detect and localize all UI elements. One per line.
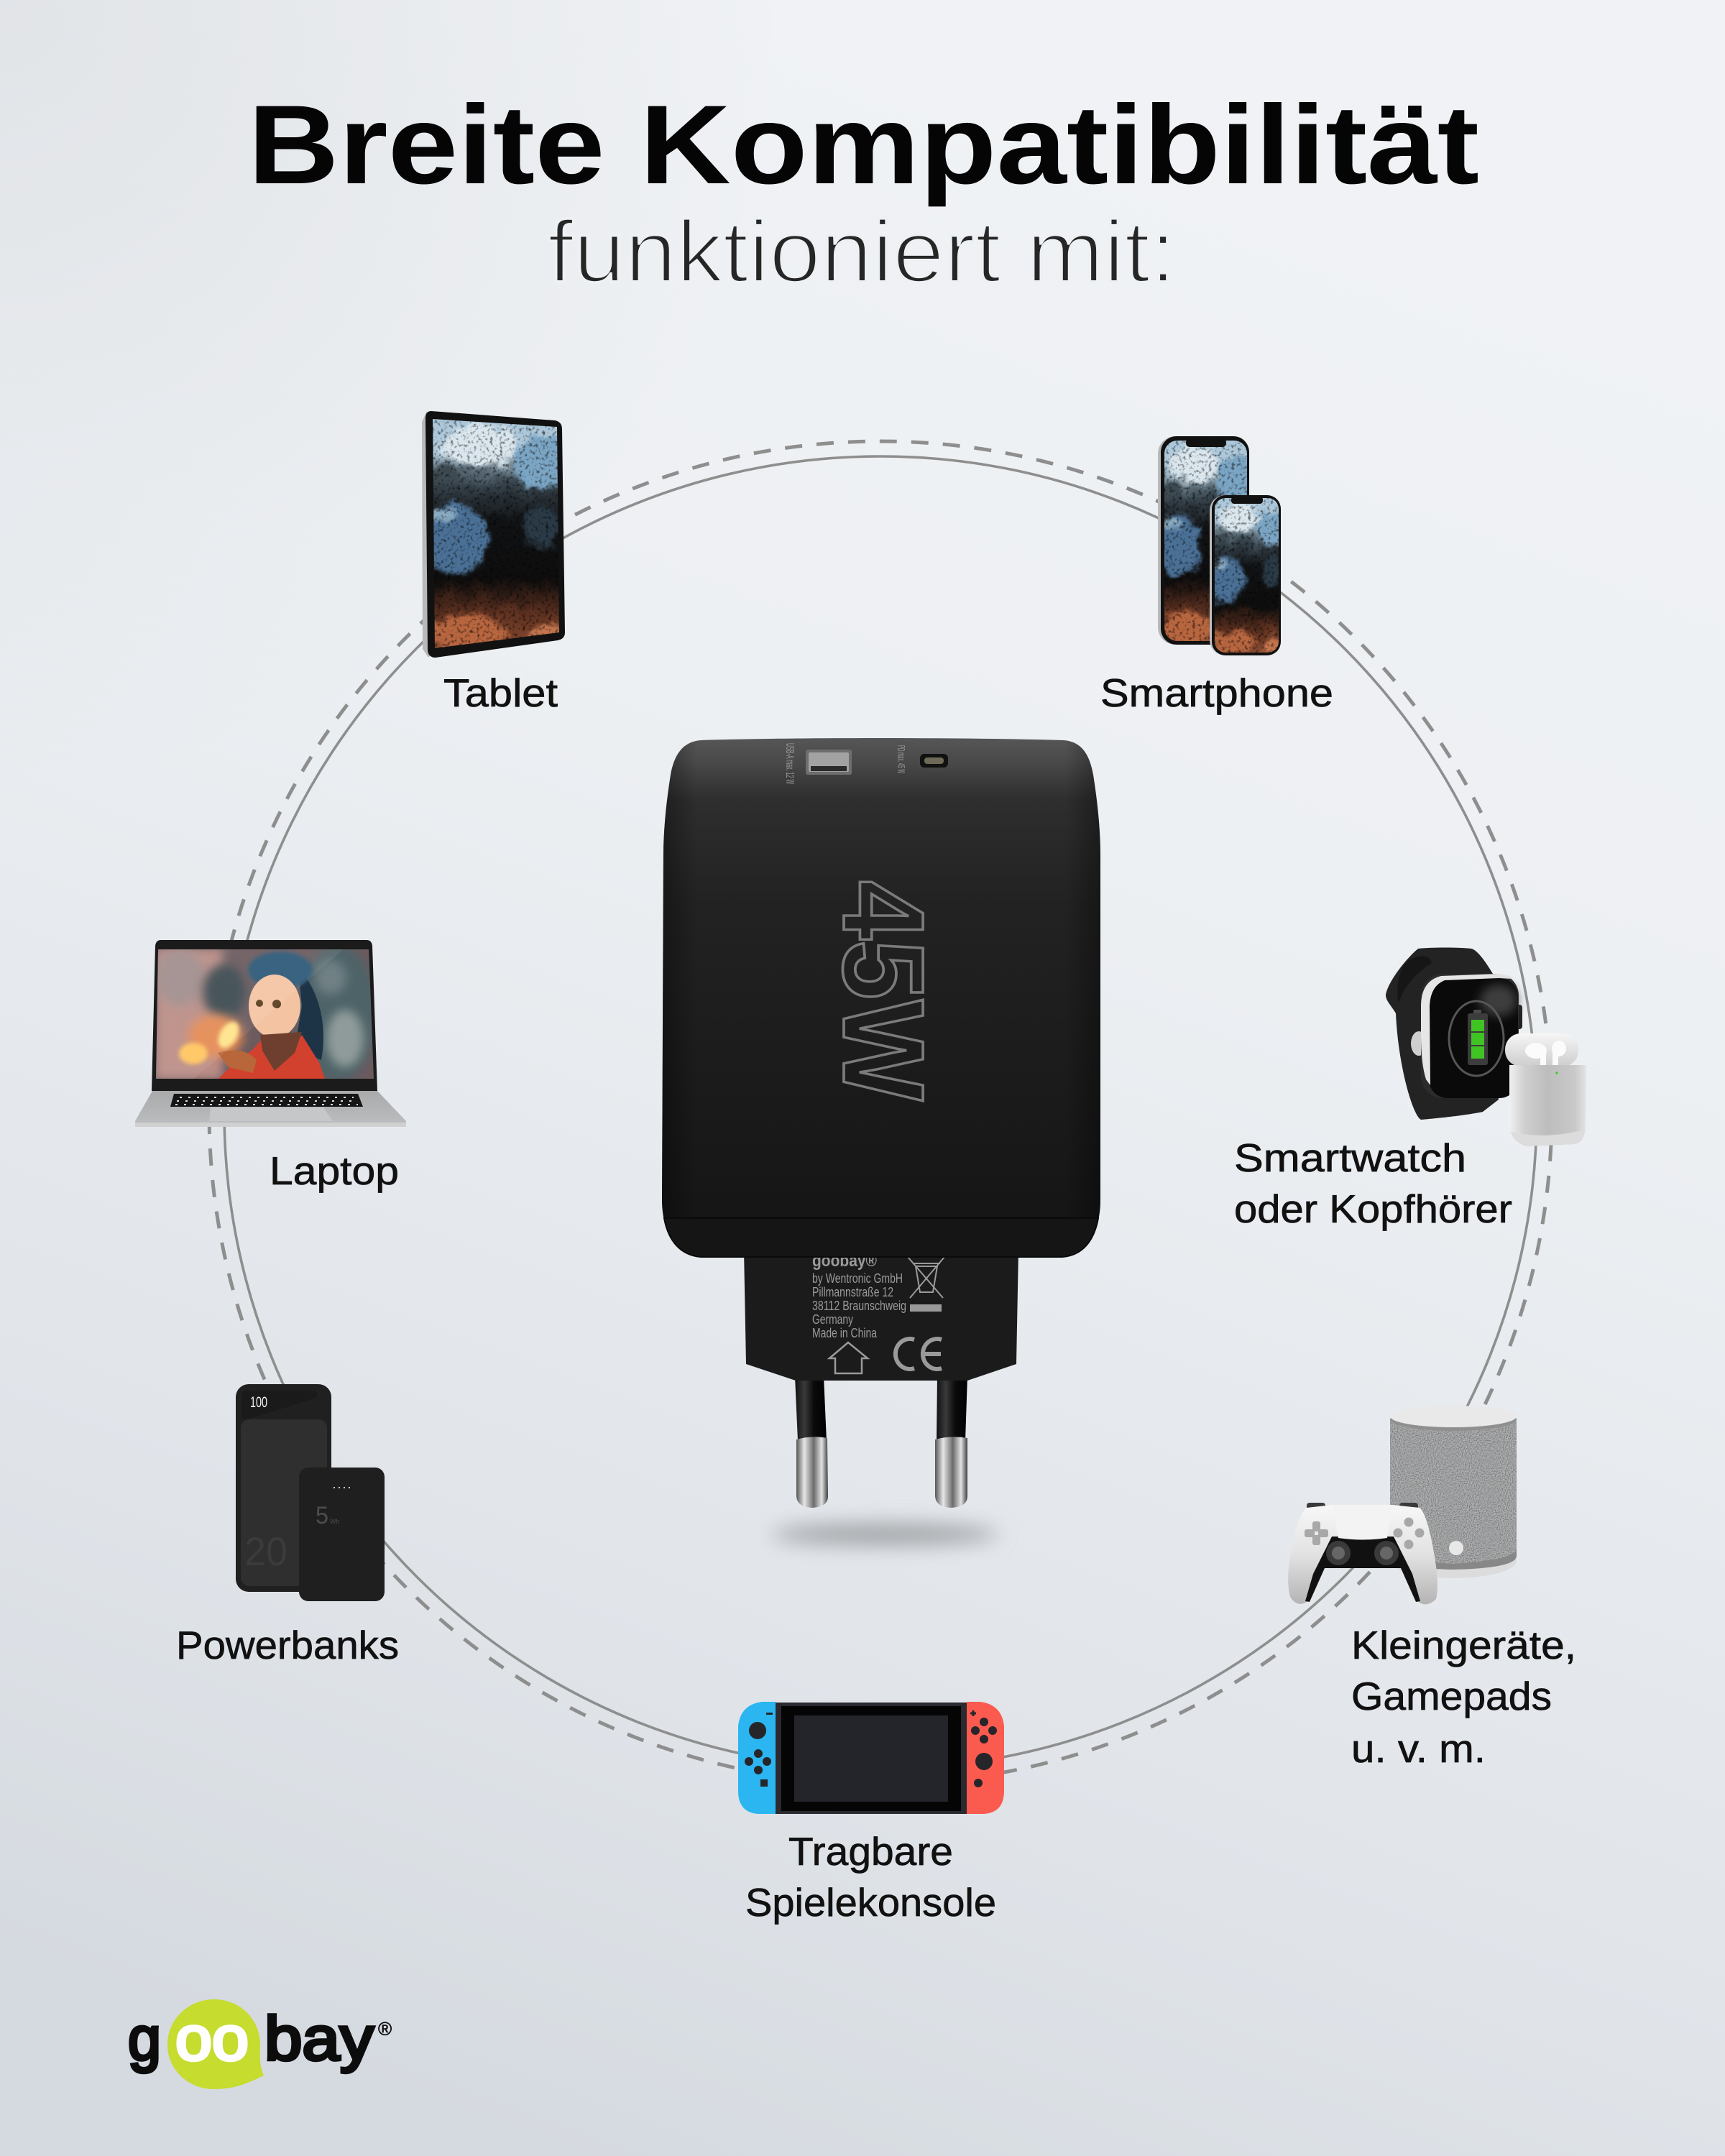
speaker fabric body — [1390, 1419, 1517, 1564]
icon: game console — [738, 1702, 1004, 1814]
label: smartwatch or headphones — [1234, 1135, 1512, 1231]
label: small devices: u. v. m. — [1351, 1726, 1486, 1771]
icon: house — [829, 1342, 868, 1373]
case bottom highlight — [1511, 1130, 1585, 1146]
tablet frame — [422, 411, 431, 658]
console bezel — [781, 1706, 961, 1811]
logo: goobay — [128, 1999, 392, 2089]
icon: tablet — [422, 411, 565, 658]
laptop lid — [152, 940, 377, 1091]
label: game console: Tragbare — [788, 1829, 953, 1874]
icon: powerbanks — [236, 1384, 385, 1601]
label: smartwatch or headphones: Smartwatch — [1234, 1135, 1466, 1180]
logo letters bay: bay — [264, 2004, 374, 2073]
weee bar — [910, 1304, 942, 1312]
d-pad — [1305, 1521, 1328, 1545]
left joy-con — [738, 1702, 776, 1814]
watch sensor — [1411, 1031, 1427, 1056]
label: smartwatch or headphones: oder Kopfhörer — [1234, 1187, 1512, 1231]
label: game console — [745, 1829, 996, 1925]
large powerbank: 20 — [244, 1529, 288, 1574]
icon: smartwatch — [1386, 947, 1522, 1120]
case body — [1509, 1065, 1586, 1146]
icon: speaker — [1390, 1406, 1517, 1578]
thumbsticks — [1326, 1541, 1399, 1565]
watch band — [1386, 947, 1499, 1120]
label: small devices — [1351, 1623, 1576, 1771]
plug legal text: Pillmannstraße 12 — [812, 1285, 893, 1299]
watch silver edge — [1421, 974, 1513, 1085]
plug legal text: by Wentronic GmbH — [812, 1271, 903, 1286]
dashed connection ring — [209, 441, 1552, 1784]
plug head — [744, 1250, 1018, 1381]
title: Breite Kompatibilität — [248, 83, 1479, 208]
tablet bezel — [426, 411, 565, 658]
large powerbank: 100 — [250, 1394, 267, 1411]
icon: laptop — [135, 940, 406, 1127]
controller centre — [1305, 1537, 1420, 1602]
laptop keyboard — [170, 1094, 363, 1107]
small powerbank: Wh — [330, 1518, 339, 1525]
console frame — [776, 1703, 967, 1814]
laptop keys — [175, 1097, 358, 1105]
logo letter g: g — [128, 2004, 161, 2073]
face buttons — [1393, 1518, 1425, 1549]
shoulder buttons — [1307, 1503, 1418, 1510]
icon: crossed-out bin — [908, 1257, 944, 1298]
earbuds — [1525, 1041, 1566, 1067]
charger side shading — [662, 738, 1100, 1257]
watch crown — [1515, 1005, 1522, 1029]
small powerbank — [299, 1468, 385, 1601]
speaker base — [1390, 1544, 1517, 1578]
icon: smartphones — [1158, 436, 1281, 655]
logo registered mark: ® — [378, 2018, 392, 2040]
tablet screen — [433, 419, 559, 648]
charging ring — [1449, 1001, 1504, 1076]
icon: gamepad — [1288, 1503, 1438, 1604]
case lid — [1505, 1033, 1578, 1067]
right plug pin — [935, 1376, 967, 1508]
label: small devices: Kleingeräte, — [1351, 1623, 1576, 1667]
plug legal text: goobay® — [812, 1251, 877, 1271]
icon: earbuds case — [1505, 1033, 1586, 1146]
watch face sheen — [1480, 985, 1517, 1016]
icon: charger: USB-A max. 12 W — [783, 743, 796, 784]
battery icon — [1468, 1010, 1488, 1065]
plug legal text: Germany — [812, 1312, 853, 1327]
watch case — [1421, 974, 1519, 1098]
speaker top rim — [1390, 1408, 1517, 1431]
laptop front edge — [135, 1123, 406, 1127]
left controls — [745, 1713, 773, 1787]
charger shadow — [771, 1524, 998, 1545]
large phone — [1158, 436, 1249, 645]
controller shell — [1288, 1505, 1438, 1604]
laptop base — [135, 1091, 406, 1127]
right joy-con — [967, 1702, 1004, 1814]
label: laptop: Laptop — [270, 1148, 399, 1193]
watch strap shadow — [1397, 957, 1432, 1003]
right controls — [970, 1710, 997, 1787]
usb-a port — [806, 750, 852, 775]
speaker top — [1390, 1406, 1517, 1427]
icon: charger — [662, 738, 1100, 1545]
watch face — [1429, 978, 1518, 1098]
small powerbank: 5 — [316, 1502, 328, 1529]
plug legal text — [812, 1251, 906, 1340]
case status led — [1555, 1072, 1558, 1074]
left plug pin — [795, 1376, 828, 1508]
ce mark — [896, 1339, 942, 1369]
logo letters oo: oo — [175, 2004, 249, 2073]
solid connection ring — [224, 456, 1537, 1769]
label: game console: Spielekonsole — [745, 1880, 996, 1925]
label: powerbanks: Powerbanks — [176, 1623, 399, 1667]
charger lower band — [664, 1218, 1098, 1257]
laptop screen image — [155, 945, 377, 1082]
charger body — [662, 738, 1100, 1257]
label: smartphone: Smartphone — [1100, 671, 1333, 715]
logo bubble — [167, 1999, 264, 2089]
large powerbank — [236, 1384, 331, 1592]
plug legal text: 38112 Braunschweig — [812, 1299, 906, 1313]
plug legal text: Made in China — [812, 1326, 878, 1340]
speaker button — [1449, 1541, 1463, 1555]
icon: charger: PD max. 45 W — [895, 745, 907, 773]
subtitle: funktioniert mit: — [548, 203, 1176, 300]
touchpad — [1333, 1505, 1392, 1539]
laptop trackpad — [209, 1107, 333, 1121]
small phone — [1210, 495, 1281, 655]
45W outline marking: 45W — [819, 880, 948, 1101]
label: tablet: Tablet — [443, 671, 558, 715]
label: small devices: Gamepads — [1351, 1674, 1552, 1718]
usb-c port — [920, 754, 948, 768]
console screen — [794, 1715, 948, 1802]
speaker base band — [1390, 1549, 1517, 1570]
